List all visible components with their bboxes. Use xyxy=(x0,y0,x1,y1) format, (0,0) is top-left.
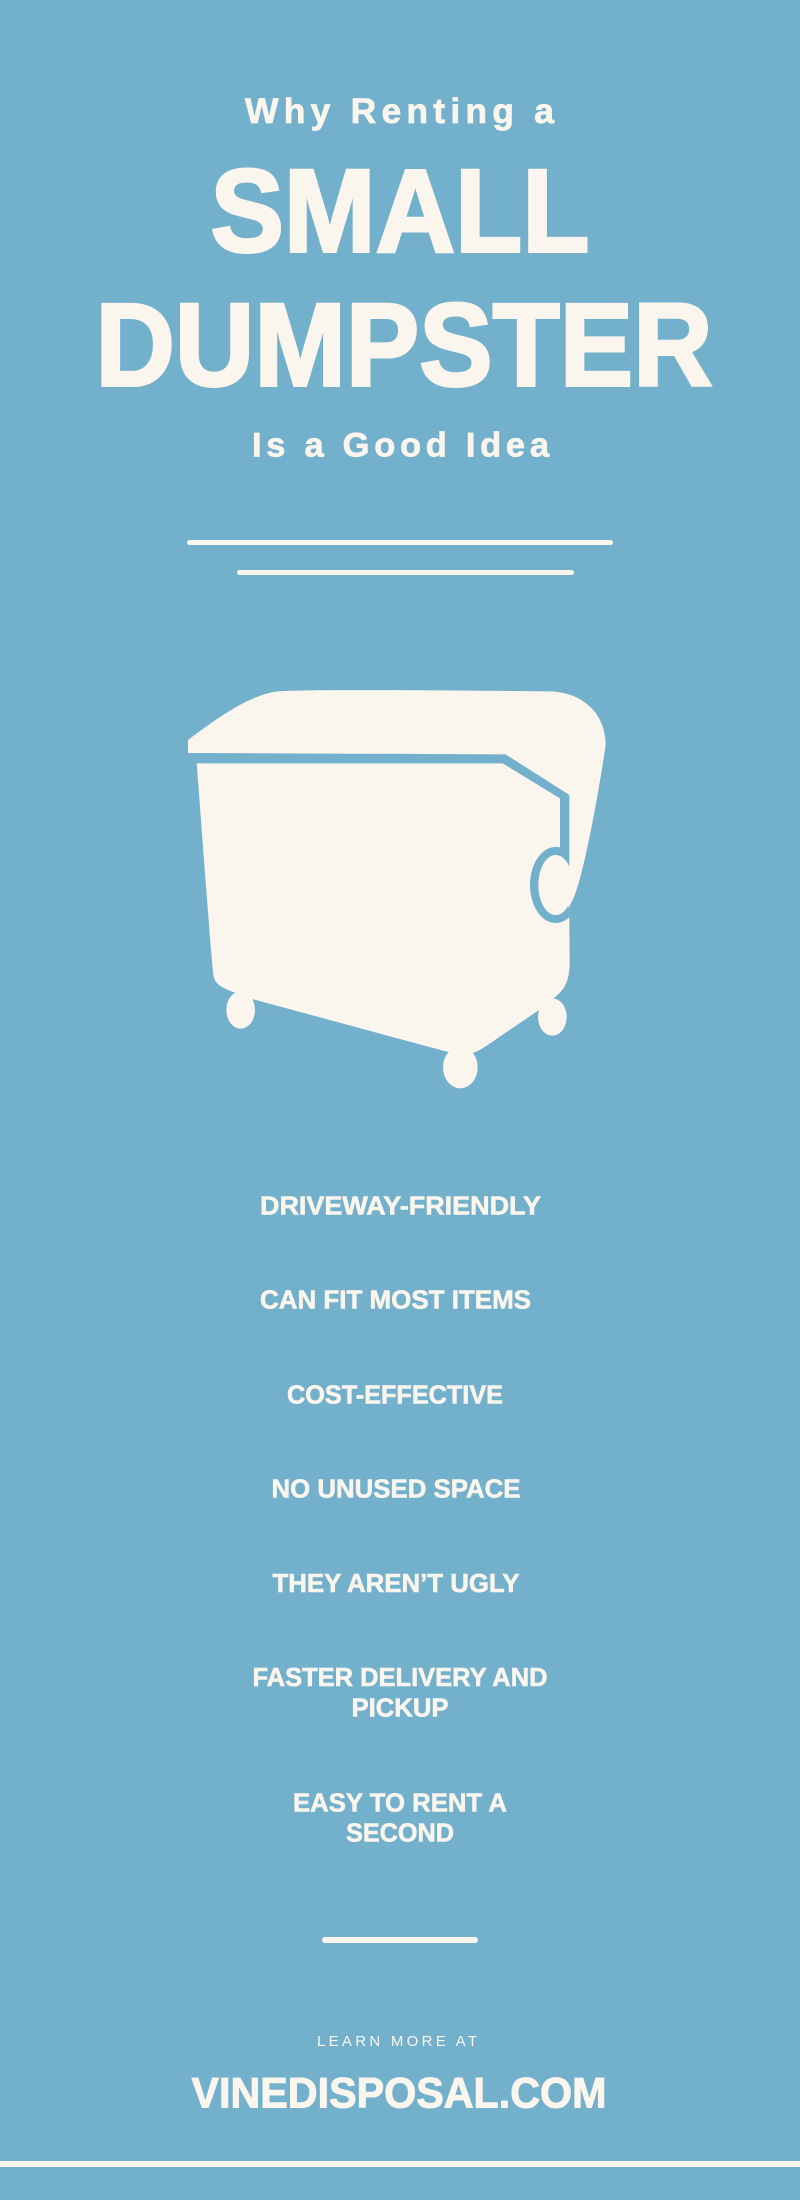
footer call to action xyxy=(192,2033,606,2118)
reason 6 xyxy=(252,1662,548,1723)
reason 5: THEY AREN’T UGLY xyxy=(272,1568,520,1598)
dumpster hinge ring xyxy=(530,847,581,923)
dumpster hinge centre xyxy=(538,855,573,915)
reason 2: CAN FIT MOST ITEMS xyxy=(260,1284,531,1314)
left wheel xyxy=(226,991,255,1029)
title line: Why Renting a: Why Renting a xyxy=(245,91,554,131)
reason 3: COST-EFFECTIVE xyxy=(287,1380,503,1410)
reason 7: EASY TO RENT A xyxy=(293,1788,507,1818)
front wheel xyxy=(443,1046,478,1088)
reason 1: DRIVEWAY-FRIENDLY xyxy=(260,1191,541,1221)
reason 7 xyxy=(293,1788,507,1848)
dumpster body xyxy=(197,763,570,1053)
list of reasons xyxy=(252,1191,548,1848)
dumpster lid xyxy=(188,690,606,908)
title xyxy=(96,91,712,464)
right wheel xyxy=(538,998,567,1036)
title line: DUMPSTER: DUMPSTER xyxy=(96,280,712,412)
website: VINEDISPOSAL.COM xyxy=(192,2070,606,2118)
icon: dumpster xyxy=(188,690,606,1088)
reason 7: SECOND xyxy=(346,1818,454,1848)
title line: SMALL: SMALL xyxy=(210,145,590,277)
learn more label: LEARN MORE AT xyxy=(317,2033,477,2050)
title divider lines xyxy=(187,540,613,575)
reason 6: PICKUP xyxy=(352,1693,448,1723)
bottom line xyxy=(0,2161,800,2167)
footer divider xyxy=(322,1937,478,1943)
reason 6: FASTER DELIVERY AND xyxy=(252,1662,548,1692)
title line: Is a Good Idea: Is a Good Idea xyxy=(252,426,550,464)
reason 4: NO UNUSED SPACE xyxy=(272,1474,520,1504)
